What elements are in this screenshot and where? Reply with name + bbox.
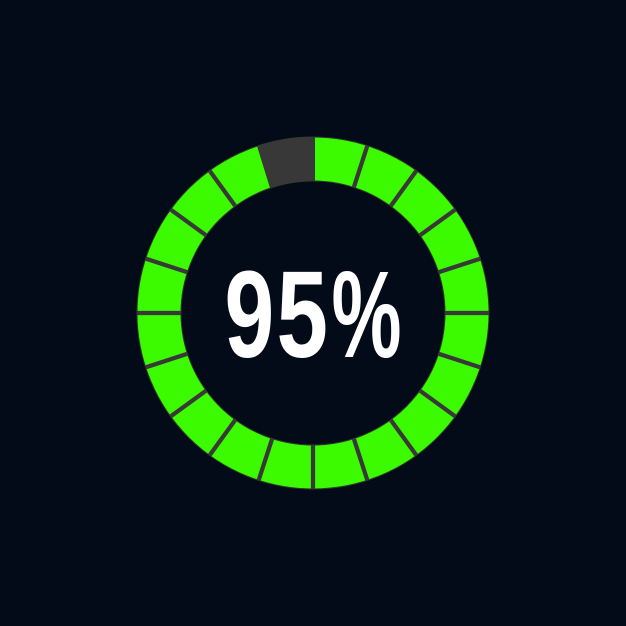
percentage label: 5 [276,246,328,384]
percentage label [224,245,402,384]
green progress band [159,159,467,467]
progress ring: 95 percent [137,137,489,489]
thin outer and inner ring edges [137,137,489,489]
segment separators [137,146,489,489]
percentage label: 9 [224,246,274,383]
percentage label: % [332,245,402,383]
remaining 5 percent grey segment [257,137,315,188]
